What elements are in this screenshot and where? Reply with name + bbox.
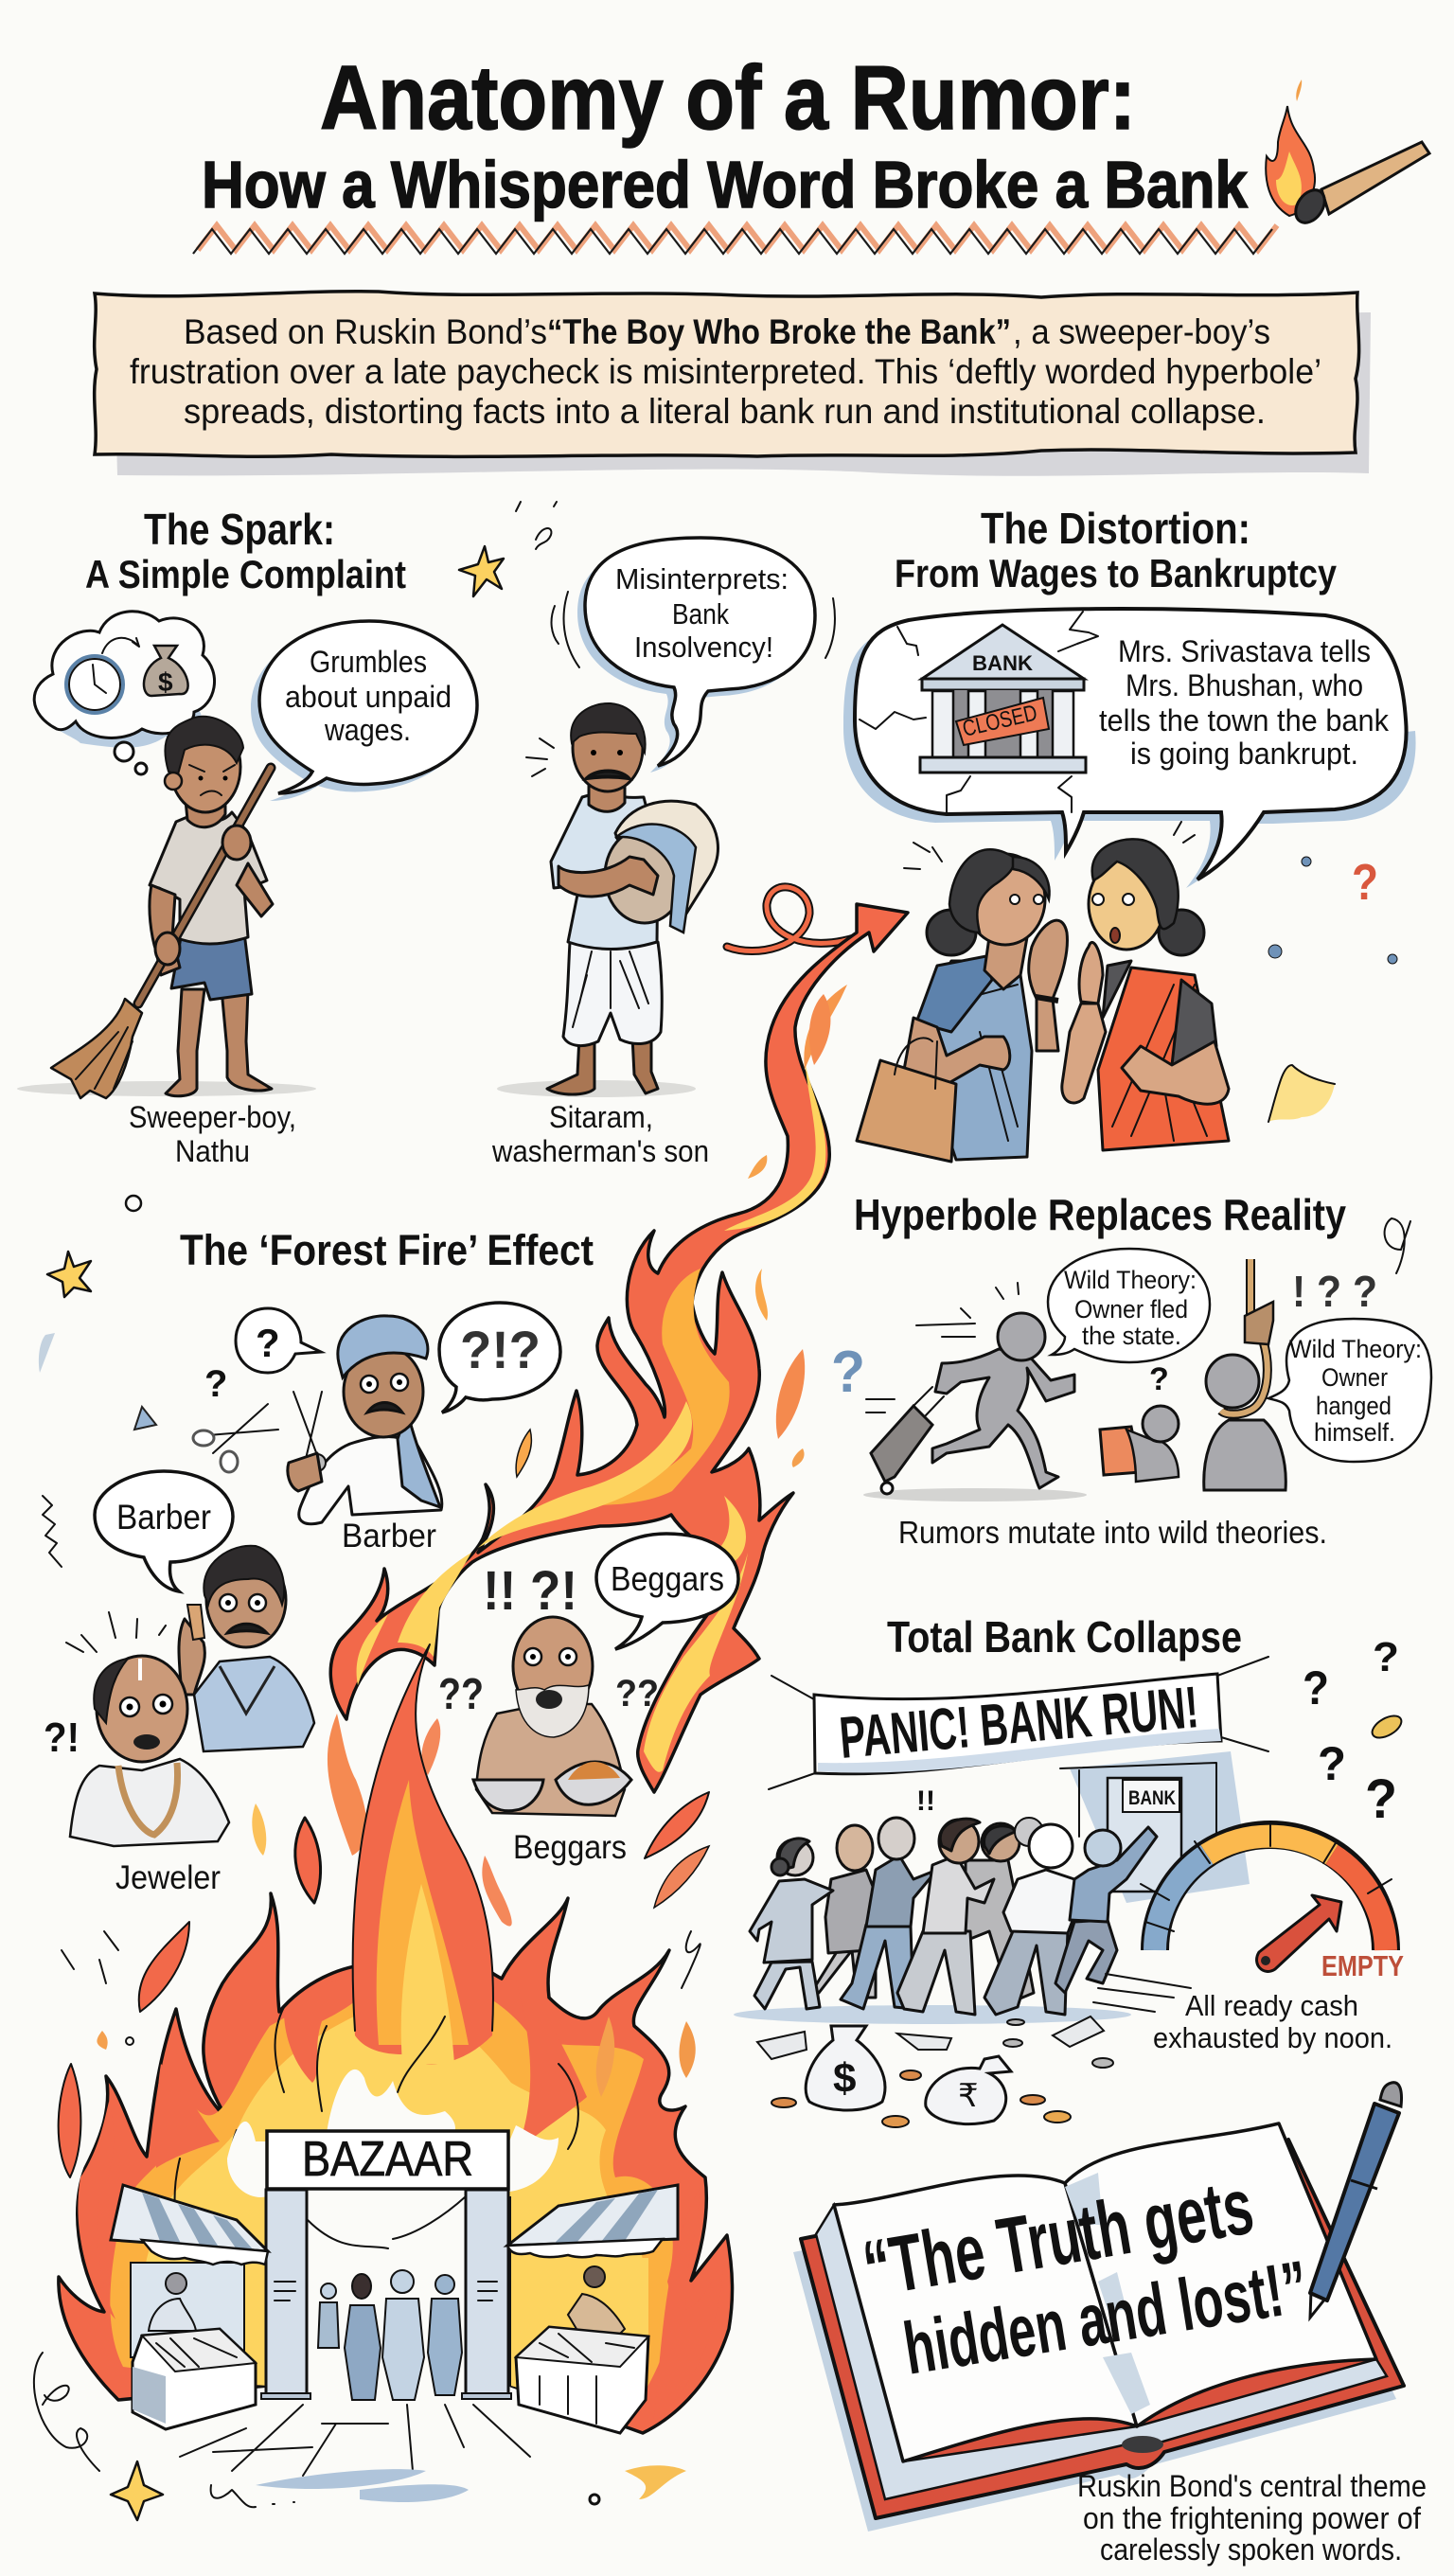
bazaar gate and stalls <box>111 2131 678 2502</box>
intro panel: torn paper: , a sweeper-boy’s <box>1013 312 1270 351</box>
decorative marks: question mark and dots: ? <box>1352 854 1378 911</box>
people <box>318 2270 462 2400</box>
heading: Hyperbole: Hyperbole Replaces Reality <box>854 1190 1346 1239</box>
right woman <box>1062 839 1229 1150</box>
lower fire mass <box>59 1893 733 2433</box>
caption: barber: Barber <box>342 1518 436 1554</box>
icon: running figure: ? <box>831 1340 865 1405</box>
title: Anatomy of a Rumor: <box>320 47 1136 149</box>
decorative marks: question mark and dots <box>1268 854 1397 1122</box>
crowd of panicked people <box>734 1785 1191 2024</box>
intro panel: torn paper: “The Boy Who Broke the Bank” <box>547 312 1011 351</box>
sign <box>267 2131 508 2189</box>
heading: The Distortion: The Distortion: <box>981 504 1250 553</box>
left woman <box>857 849 1067 1162</box>
figure: barber with scissors <box>288 1316 442 1524</box>
figure: beggar with bowls: ?? <box>615 1673 659 1714</box>
icon: closed bank <box>860 612 1098 812</box>
decorative doodles bottom-left <box>34 1931 700 2520</box>
banner: panic bank run <box>769 1657 1268 1789</box>
wild theory: owner hanged: hanged <box>1316 1392 1392 1420</box>
figure: beggar with bowls: ?? <box>438 1669 484 1718</box>
intro panel: torn paper: spreads, distorting facts into a literal bank run and institutional collapse. <box>184 392 1266 431</box>
crowd of panicked people: !! <box>916 1785 935 1817</box>
figure: jeweler: ?! <box>44 1714 80 1761</box>
title <box>202 47 1248 222</box>
speech bubble: Barber <box>95 1471 233 1591</box>
heading: The Spark: A Simple Complaint <box>85 552 406 596</box>
person 6 white shirt <box>984 1824 1098 2015</box>
icon: hanged silhouette with noose: ! ? ? <box>1292 1267 1377 1316</box>
wild theory: owner hanged: Wild Theory: <box>1289 1335 1422 1363</box>
caption: jeweler: Jeweler <box>115 1859 221 1896</box>
figure: man on phone <box>179 1546 314 1751</box>
speech bubble: bank closed: tells the town the bank <box>1099 703 1390 737</box>
icon: star <box>459 502 557 596</box>
heading: The Distortion: From Wages to Bankruptcy <box>895 551 1338 595</box>
figure: Sitaram <box>497 703 718 1097</box>
bazaar gate and stalls: BAZAAR <box>302 2132 473 2187</box>
speech bubble: misinterprets: Insolvency! <box>634 631 773 664</box>
book with quotation <box>793 2123 1404 2532</box>
speech bubble: bank closed <box>843 609 1416 888</box>
gauge: empty cash meter <box>1141 1822 1404 1982</box>
figure: beggar with bowls: !! ?! <box>483 1560 577 1622</box>
rising flame ribbon and fire <box>59 887 908 2433</box>
question marks: ? <box>1373 1634 1399 1680</box>
gate columns <box>266 2190 307 2396</box>
heading: The Spark <box>85 505 406 596</box>
left stall <box>111 2185 268 2429</box>
icon: burning match <box>1266 80 1429 228</box>
icon: reader with book <box>1100 1361 1179 1482</box>
right stall <box>507 2185 678 2433</box>
icon: hanged silhouette with noose <box>1204 1218 1410 1490</box>
money bags, bills and coins: ₹ <box>958 2078 979 2114</box>
white glow near sign <box>312 2070 455 2141</box>
speech bubble: question: ? <box>256 1321 280 1365</box>
icon: pen <box>1310 2083 1402 2318</box>
ground lines <box>180 2405 530 2476</box>
question marks <box>1303 1634 1405 1830</box>
speech bubble: grumbles <box>251 621 477 801</box>
wild theory: owner fled: the state. <box>1082 1322 1181 1350</box>
icon: star 2 <box>39 1196 141 1567</box>
wild theory: owner fled: Owner fled <box>1074 1295 1188 1324</box>
orange licks on lower fire <box>284 1969 370 2083</box>
caption: ready cash <box>1153 1989 1392 2054</box>
zigzag underline <box>193 225 1277 254</box>
bank building behind crowd: BANK <box>1128 1787 1176 1809</box>
figure: jeweler <box>44 1612 229 1846</box>
speech bubble: Barber: Barber <box>116 1498 211 1537</box>
icon: scissors: ? <box>204 1363 227 1405</box>
icon: scissors <box>134 1363 278 1472</box>
person 3 <box>841 1818 937 2009</box>
money bags, bills and coins: $ <box>833 2055 856 2102</box>
small tongues around the central flame <box>328 1714 367 1856</box>
icon: running figure <box>831 1283 1087 1501</box>
curl arrow tail <box>727 887 857 951</box>
person 7 raising arm <box>1055 1827 1157 1993</box>
speech bubble: grumbles: Grumbles <box>310 645 427 679</box>
question marks: ? <box>1318 1737 1346 1790</box>
upper fire band <box>330 904 908 1792</box>
caption: Sitaram <box>491 1100 709 1168</box>
icon: closed bank: CLOSED <box>960 701 1039 742</box>
person 2 <box>814 1825 876 1998</box>
speech bubble: bank closed: is going bankrupt. <box>1130 737 1358 771</box>
heading: The Distortion <box>895 504 1338 595</box>
yellow streaks in ribbon and band <box>724 1060 825 1231</box>
question marks: ? <box>1303 1661 1329 1714</box>
person 1 woman <box>750 1839 833 2009</box>
speech bubble: bank closed: Mrs. Srivastava tells <box>1118 634 1371 668</box>
speech bubble: grumbles: wages. <box>324 713 411 747</box>
wild theory: owner fled: Wild Theory: <box>1064 1266 1197 1294</box>
thought bubble: clock and money: $ <box>158 667 173 697</box>
heading: Forest Fire: The ‘Forest Fire’ Effect <box>180 1226 594 1274</box>
wild theory: owner hanged <box>1100 1218 1431 1490</box>
speech bubble: Beggars: Beggars <box>611 1559 724 1598</box>
wild theory: owner hanged: himself. <box>1314 1418 1395 1447</box>
speech bubble: question <box>236 1308 321 1373</box>
title: How a Whispered Word Broke a Bank <box>202 148 1248 222</box>
heading: Total Bank Collapse: Total Bank Collapse <box>887 1612 1242 1661</box>
banner: panic bank run: PANIC! BANK RUN! <box>837 1675 1201 1771</box>
person 4 <box>897 1819 994 2015</box>
speech bubble: misinterprets: Bank <box>672 597 729 631</box>
heading: The Spark: The Spark: <box>144 505 335 554</box>
wild theory: owner fled <box>831 1249 1210 1501</box>
thought bubble: clock and money <box>34 612 215 774</box>
icon: reader with book: ? <box>1149 1361 1169 1397</box>
central tall tongue on top of the lower fire <box>353 1644 493 2064</box>
speech bubble: grumbles: about unpaid <box>285 680 452 714</box>
person 5 rear <box>966 1818 1043 2002</box>
caption: central theme <box>1077 2469 1427 2567</box>
question marks: ? <box>1365 1768 1397 1830</box>
caption: Sitaram: Sitaram, <box>549 1100 653 1134</box>
wild theory: owner hanged: Owner <box>1321 1363 1388 1392</box>
icon: closed bank: BANK <box>972 651 1033 675</box>
caption: beggars: Beggars <box>513 1829 627 1866</box>
caption: sweeper-boy: Sweeper-boy, <box>129 1100 296 1134</box>
speech bubble: misinterprets: Misinterprets: <box>615 562 789 595</box>
intro panel: torn paper <box>95 292 1371 476</box>
speech bubble: question exclamation <box>439 1303 560 1412</box>
caption: rumors mutate: Rumors mutate into wild theories. <box>898 1515 1327 1550</box>
caption: central theme: Ruskin Bond's central theme <box>1077 2469 1427 2503</box>
caption: ready cash: exhausted by noon. <box>1153 2021 1392 2054</box>
caption: central theme: carelessly spoken words. <box>1100 2532 1402 2567</box>
caption: central theme: on the frightening power of <box>1083 2501 1421 2535</box>
intro panel: torn paper: Based on Ruskin Bond’s <box>184 312 547 351</box>
gauge: empty cash meter: EMPTY <box>1321 1949 1404 1982</box>
caption: Sitaram: washerman's son <box>491 1134 709 1168</box>
caption: sweeper-boy <box>129 1100 296 1168</box>
figure: sweeper-boy Nathu <box>17 717 316 1098</box>
speech bubble: Beggars <box>596 1534 738 1649</box>
caption: sweeper-boy: Nathu <box>175 1134 250 1168</box>
money bags, bills and coins <box>757 2016 1113 2127</box>
figure: beggar with bowls <box>438 1560 659 1816</box>
figures: two whispering women <box>857 822 1229 1162</box>
lower fire yellow core <box>110 1978 673 2419</box>
intro panel: torn paper: frustration over a late paycheck is misinterpreted. This ‘deftly worded hyperbole’ <box>130 352 1321 391</box>
caption: ready cash: All ready cash <box>1185 1989 1358 2022</box>
bank building behind crowd <box>1060 1751 1250 1903</box>
speech bubble: bank closed: Mrs. Bhushan, who <box>1126 668 1363 702</box>
book with quotation: “The Truth gets <box>857 2161 1259 2314</box>
speech bubble: question exclamation: ?!? <box>460 1320 541 1379</box>
stray embers <box>139 1922 189 2012</box>
speech bubble: misinterprets <box>552 538 835 773</box>
